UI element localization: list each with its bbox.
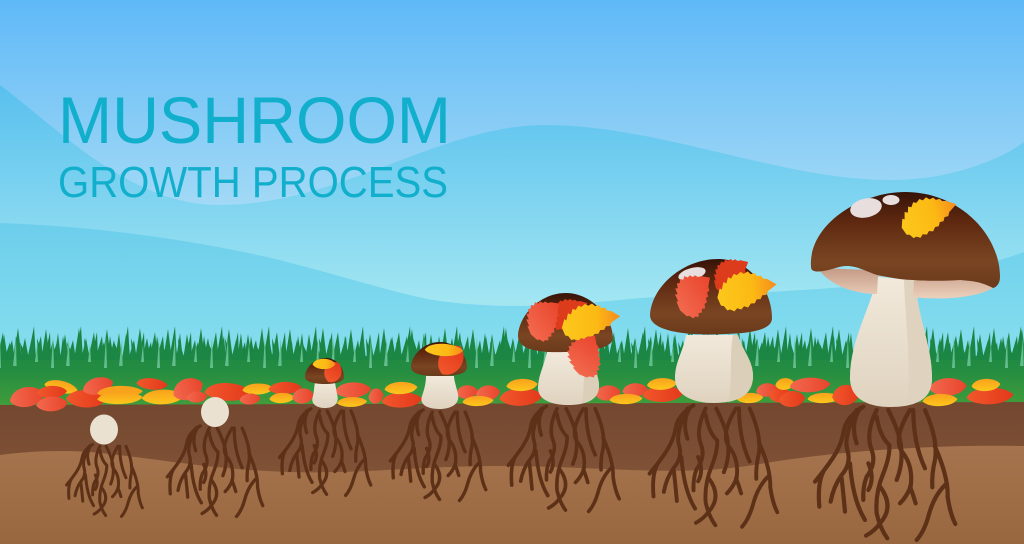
stage 6: large mushroom <box>650 251 778 527</box>
stage 5: medium mushroom <box>508 291 621 511</box>
roots 4 <box>390 410 486 500</box>
stem 3 <box>312 382 338 408</box>
grass <box>0 326 1024 408</box>
roots 1 <box>67 444 142 516</box>
leaf: red top <box>543 293 593 333</box>
title <box>58 83 451 207</box>
roots 6 <box>650 405 777 527</box>
stage 7: mature mushroom <box>811 190 1000 540</box>
stage 3: small mushroom <box>280 358 371 495</box>
roots 5 <box>508 406 619 511</box>
stem shading 5 <box>582 352 599 403</box>
stage 1: buried button with roots <box>67 414 142 516</box>
spots 7 <box>848 195 900 221</box>
leaf: red left <box>665 265 725 323</box>
stem 5 <box>538 352 599 405</box>
title line: mushroom: MUSHROOM <box>58 83 451 157</box>
cap 7 <box>811 192 1000 288</box>
highlight 6 <box>677 265 707 283</box>
cap underside 7 <box>818 268 1000 298</box>
fallen autumn leaves <box>9 375 1013 411</box>
leaf: red left <box>517 291 573 347</box>
stem shading 6 <box>728 335 753 402</box>
button 2 <box>201 397 229 427</box>
button 1 <box>90 414 118 444</box>
stage 2: emerging button with roots <box>167 397 263 516</box>
cap 4 <box>411 342 467 376</box>
stem 4 <box>421 376 458 409</box>
roots 2 <box>167 426 263 516</box>
leaves 4 <box>431 340 471 380</box>
leaf: yellow <box>896 190 962 242</box>
roots 3 <box>280 409 371 495</box>
cap 5 <box>518 293 613 352</box>
stem 7 <box>850 277 932 407</box>
leaf: red hanging <box>559 327 615 383</box>
leaves 6 <box>665 251 778 323</box>
stage 4: young mushroom <box>390 340 486 500</box>
soil lower layer <box>0 446 1024 544</box>
stem 6 <box>675 335 753 403</box>
leaf: yellow <box>716 269 778 313</box>
title line: growth process: GROWTH PROCESS <box>58 158 448 207</box>
leaf: yellow <box>561 302 621 342</box>
roots 7 <box>815 407 955 540</box>
cap 3 <box>305 358 344 384</box>
stem shading 7 <box>904 280 932 405</box>
soil upper layer <box>0 402 1024 544</box>
leaf: red top <box>706 251 758 299</box>
leaves 3 <box>320 358 346 386</box>
leaves 5 <box>517 291 621 383</box>
cap 6 <box>650 259 772 334</box>
sky background <box>0 0 1024 420</box>
